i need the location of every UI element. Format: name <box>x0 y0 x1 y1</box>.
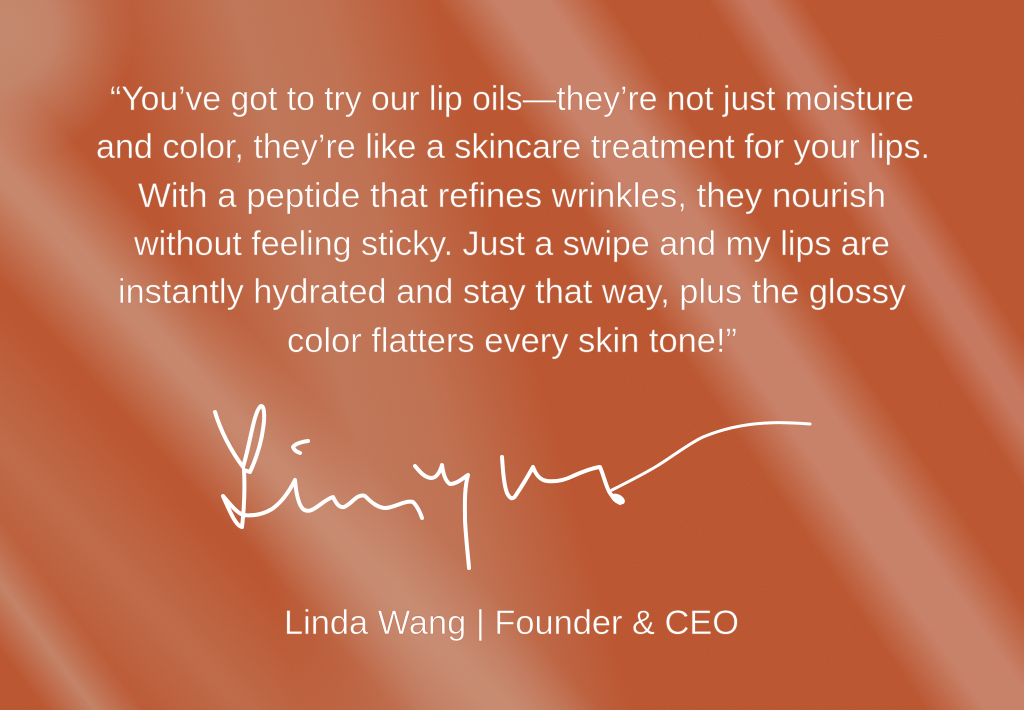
quote text <box>96 80 930 360</box>
quote text: With a peptide that refines wrinkles, they nourish <box>138 177 886 215</box>
quote text: color flatters every skin tone!” <box>287 322 737 360</box>
quote text: and color, they’re like a skincare treatment for your lips. <box>96 128 930 166</box>
signature <box>215 406 810 568</box>
attribution: Linda Wang | Founder & CEO <box>284 604 739 642</box>
quote text: without feeling sticky. Just a swipe and my lips are <box>133 225 890 263</box>
quote text: “You’ve got to try our lip oils—they’re not just moisture <box>110 80 914 118</box>
quote text: instantly hydrated and stay that way, plus the glossy <box>118 273 906 311</box>
